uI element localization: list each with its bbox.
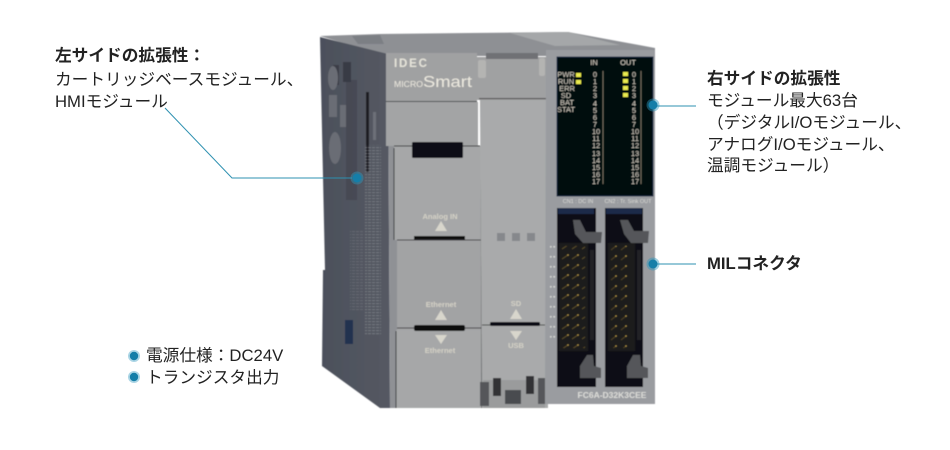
front panel: logo plate: Smart xyxy=(423,74,473,91)
left front strip xyxy=(388,53,397,408)
OUT numbers: 6 xyxy=(632,113,636,122)
LED display panel: IN xyxy=(590,58,598,67)
text: right side expansion: モジュール最大63台 xyxy=(707,91,858,110)
front cover: Ethernet upper: Ethernet xyxy=(426,300,457,309)
text: right side expansion xyxy=(707,69,911,175)
spec list xyxy=(128,346,284,387)
connector labels: CN1 : DC IN xyxy=(563,199,593,205)
spec list: トランジスタ出力 xyxy=(146,368,280,387)
OUT numbers xyxy=(631,70,639,186)
front cover: Ethernet upper xyxy=(397,240,482,332)
front panel: logo plate xyxy=(386,53,477,102)
OUT numbers: 12 xyxy=(631,141,639,150)
IN numbers: 3 xyxy=(593,91,597,100)
IN numbers: 5 xyxy=(593,106,597,115)
front cover: Analog IN: Analog IN xyxy=(422,212,458,221)
IN numbers: 0 xyxy=(593,70,597,79)
IN numbers: 13 xyxy=(592,149,600,158)
status labels: ERR xyxy=(559,84,575,93)
front panel: logo plate: IDEC xyxy=(394,58,429,70)
IN numbers: 17 xyxy=(592,177,600,186)
connector CN1 xyxy=(557,208,602,387)
text: right side expansion: （デジタルI/Oモジュール、 xyxy=(707,112,911,132)
status labels xyxy=(557,70,575,114)
OUT numbers: 15 xyxy=(631,163,639,172)
status labels: RUN xyxy=(558,77,574,86)
LED display panel: OUT xyxy=(620,58,636,67)
status labels: SD xyxy=(561,91,572,100)
OUT numbers: 16 xyxy=(631,170,639,179)
front cover: Ethernet lower xyxy=(396,325,482,408)
OUT LEDs xyxy=(623,72,628,76)
IN numbers: 4 xyxy=(593,99,597,108)
OUT numbers: 3 xyxy=(632,91,636,100)
OUT numbers: 10 xyxy=(631,127,639,136)
OUT numbers: 0 xyxy=(632,70,636,79)
front cover: Analog IN xyxy=(394,142,482,240)
text: left side expansion xyxy=(55,46,303,111)
LED display panel xyxy=(557,57,653,196)
status labels: PWR xyxy=(557,70,575,79)
OUT numbers: 5 xyxy=(632,106,636,115)
IN numbers: 6 xyxy=(593,113,597,122)
IN numbers: 14 xyxy=(592,156,600,165)
IN numbers: 15 xyxy=(592,163,600,172)
front panel: logo plate: MICRO xyxy=(394,79,423,89)
IN numbers: 11 xyxy=(592,134,600,143)
left side panel xyxy=(320,37,390,408)
text: right side expansion: 温調モジュール） xyxy=(707,156,839,175)
front cover: Ethernet lower: Ethernet xyxy=(425,346,456,355)
terminal dots xyxy=(550,246,556,346)
text: right side expansion: アナログI/Oモジュール、 xyxy=(707,135,895,154)
OUT numbers: 14 xyxy=(631,156,639,165)
status labels: STAT xyxy=(557,105,575,114)
OUT numbers: 2 xyxy=(632,84,636,93)
text: left side expansion: HMIモジュール xyxy=(55,92,168,111)
status labels: BAT xyxy=(560,98,574,107)
front panel: upper plate xyxy=(386,102,478,146)
OUT numbers: 13 xyxy=(631,149,639,158)
connector CN2 xyxy=(605,208,649,387)
OUT numbers: 7 xyxy=(632,120,636,129)
IN numbers: 1 xyxy=(593,77,597,86)
OUT numbers: 17 xyxy=(631,177,639,186)
spec list: 電源仕様：DC24V xyxy=(146,346,284,365)
IN numbers: 7 xyxy=(593,120,597,129)
centre column: USB xyxy=(508,341,524,350)
right module body xyxy=(545,50,655,404)
callout: MIL connector leader xyxy=(646,258,696,270)
IN numbers: 10 xyxy=(592,127,600,136)
model number: FC6A-D32K3CEE xyxy=(578,390,647,400)
IN numbers: 16 xyxy=(592,170,600,179)
product photo: PLC unit xyxy=(320,32,655,408)
OUT numbers: 1 xyxy=(632,77,636,86)
text: left side expansion: 左サイドの拡張性： xyxy=(55,46,205,65)
IN numbers: 12 xyxy=(592,141,600,150)
callout: right side leader xyxy=(646,98,696,112)
centre column xyxy=(477,53,548,408)
text: right side expansion: 右サイドの拡張性 xyxy=(707,69,841,88)
connector labels: CN2 : Tr. Sink OUT xyxy=(604,199,652,205)
IN numbers: 2 xyxy=(593,84,597,93)
centre column: SD xyxy=(511,299,522,308)
top face of the unit xyxy=(320,32,655,56)
IN numbers xyxy=(592,70,600,186)
bottom latch xyxy=(480,376,545,408)
callout: left side leader xyxy=(165,108,364,184)
OUT numbers: 4 xyxy=(632,99,636,108)
connector labels xyxy=(563,199,652,205)
status LEDs xyxy=(576,73,581,77)
text: MIL connector: MILコネクタ xyxy=(707,254,802,273)
text: left side expansion: カートリッジベースモジュール、 xyxy=(55,70,303,89)
OUT numbers: 11 xyxy=(631,134,639,143)
